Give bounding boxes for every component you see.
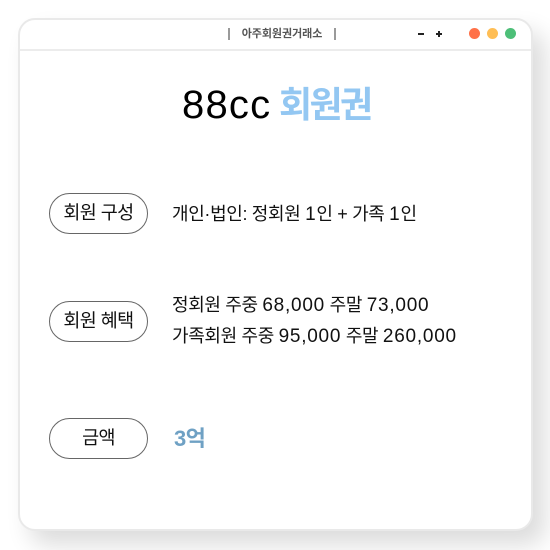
pill label: price: 금액	[82, 427, 115, 448]
window title bar	[20, 20, 531, 51]
main title: 회원권	[279, 84, 371, 125]
minus icon	[418, 33, 424, 35]
member benefits text	[172, 295, 457, 347]
pill label: member benefits: 회원 혜택	[63, 310, 134, 331]
title bar label: 아주회원권거래소	[242, 28, 322, 40]
membership composition text: 개인·법인: 정회원 1인 + 가족 1인	[172, 204, 417, 225]
pill label: price	[49, 418, 148, 459]
main title	[182, 83, 371, 127]
pill label: member benefits	[49, 301, 148, 342]
member benefits text: 정회원 주중 68,000 주말 73,000	[172, 295, 429, 316]
pill label: membership composition: 회원 구성	[63, 202, 134, 223]
window dot: green	[505, 28, 516, 39]
title divider left	[228, 28, 230, 40]
main title: 88cc	[182, 83, 271, 127]
pill label: membership composition	[49, 193, 148, 234]
title divider right	[334, 28, 336, 40]
window dot: yellow	[487, 28, 498, 39]
zoom controls	[418, 31, 442, 37]
price value: 3억	[174, 426, 205, 451]
plus icon	[436, 33, 442, 35]
member benefits text: 가족회원 주중 95,000 주말 260,000	[172, 326, 457, 347]
window dot: red	[469, 28, 480, 39]
